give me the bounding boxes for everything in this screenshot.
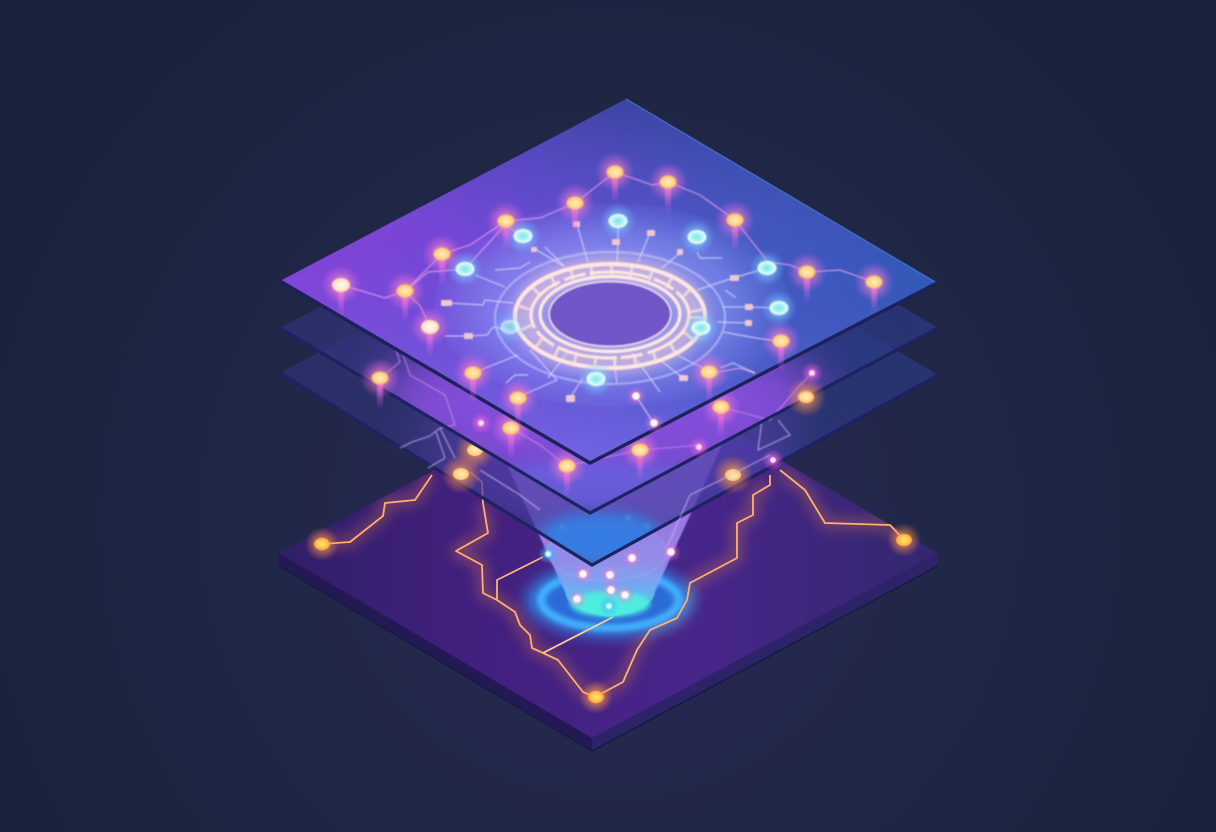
top layer highlighted upper right edge	[626, 99, 937, 283]
funnel of light	[450, 340, 770, 617]
base top face	[279, 368, 938, 738]
halo disc	[434, 203, 790, 407]
top layer orange nodes	[321, 152, 894, 429]
panel: layer two	[279, 305, 938, 515]
top layer lower edge	[280, 281, 937, 463]
layer two pink traces	[380, 330, 812, 466]
inner ring	[540, 276, 680, 352]
top layer shading	[280, 99, 937, 463]
panel: layer three	[279, 327, 938, 567]
connector junction squares	[441, 221, 753, 402]
layer three edge	[280, 373, 938, 565]
panel: top layer	[280, 99, 937, 463]
segmented band	[524, 269, 696, 363]
ring band	[541, 572, 679, 628]
ring glow	[526, 563, 694, 637]
layer two nodes	[360, 358, 826, 497]
top layer cyan nodes	[447, 203, 797, 397]
top layer surface	[280, 99, 937, 463]
layer two tip lavender glow	[515, 459, 673, 511]
layer two purple glow	[375, 320, 825, 511]
funnel inner ellipse	[547, 523, 667, 581]
layer three pale traces	[400, 420, 790, 545]
layer three nodes	[441, 430, 784, 495]
layer three blue tip glow	[538, 512, 662, 564]
funnel bottom glow	[570, 591, 650, 617]
centre disc	[549, 282, 671, 346]
blue landing ring	[526, 563, 694, 637]
faint outer ring	[495, 252, 725, 384]
base underside edge	[279, 566, 938, 751]
base nodes	[305, 523, 921, 714]
base left side face	[279, 553, 592, 751]
layer two edge	[280, 328, 938, 513]
central ring	[495, 252, 725, 384]
pink circuit links	[341, 172, 874, 374]
ring glow	[526, 269, 694, 361]
outer ring	[515, 264, 705, 368]
small white node	[626, 386, 664, 433]
funnel body	[450, 340, 770, 617]
segmented inner ring	[531, 272, 689, 358]
panel: base circuit board	[279, 436, 938, 752]
ring inner disc	[548, 575, 672, 625]
orange trace glow	[322, 470, 904, 697]
base right side face	[592, 553, 938, 751]
layer three glass	[280, 190, 938, 565]
layer three purple glow	[408, 406, 812, 563]
orange circuit traces	[322, 470, 904, 697]
layer two glass	[280, 144, 938, 513]
pale circuit connectors	[445, 221, 782, 422]
funnel particle dots	[538, 508, 681, 616]
